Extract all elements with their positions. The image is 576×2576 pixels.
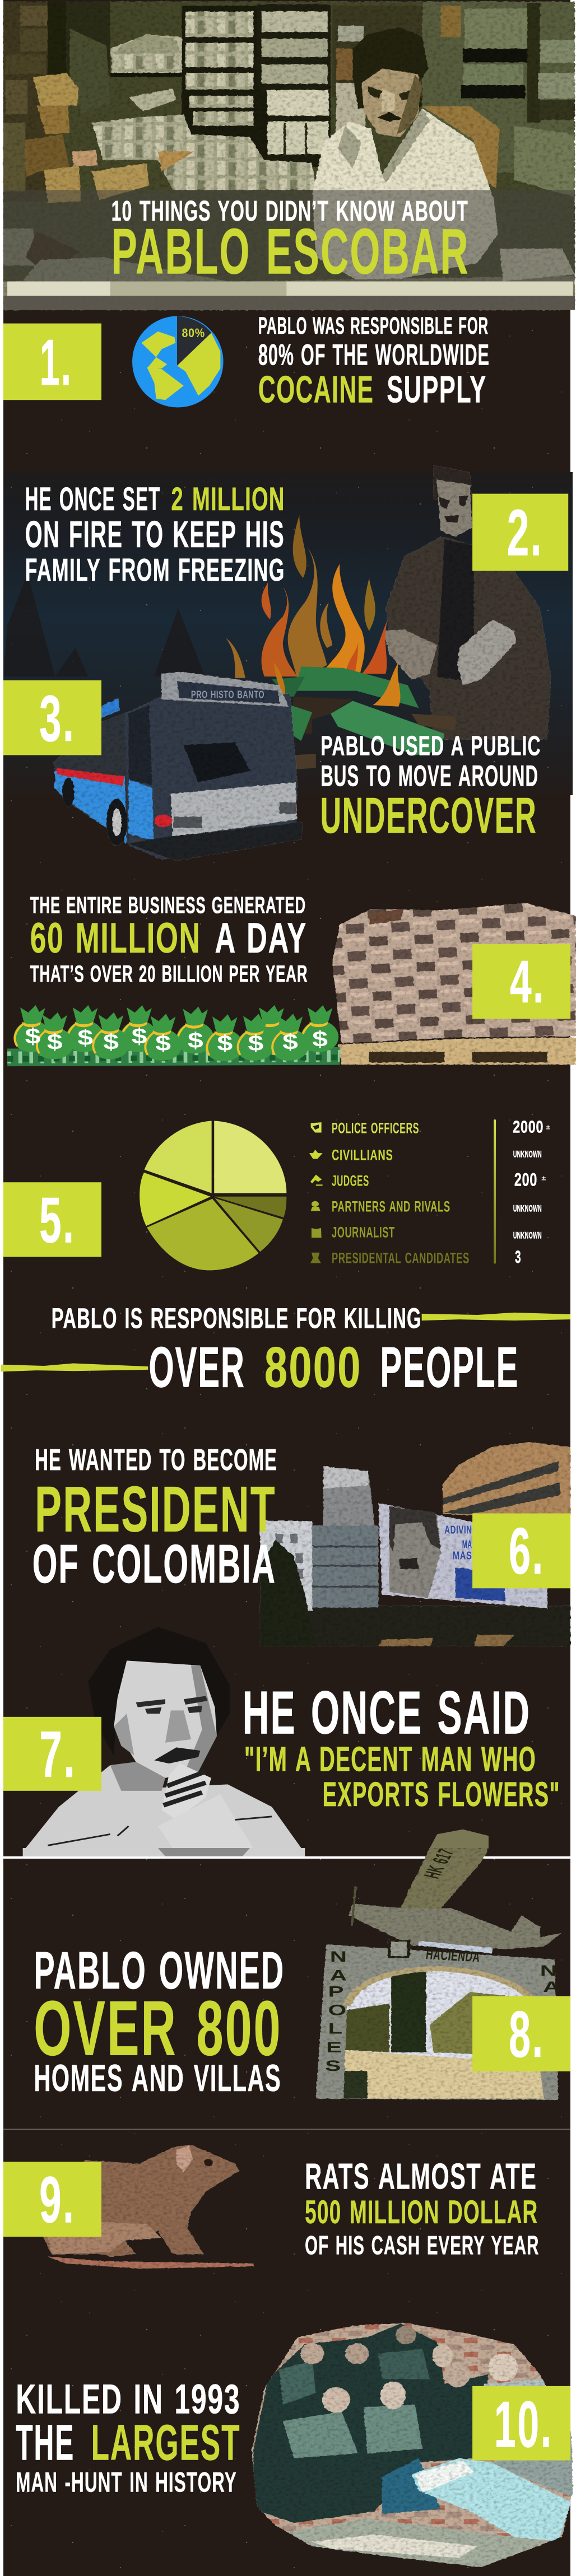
hacienda napoles gate and plane: A bbox=[543, 1979, 561, 1995]
scribble line left bbox=[1, 1363, 148, 1371]
white divider bbox=[3, 1856, 570, 1859]
over 8000 people bbox=[149, 1336, 519, 1399]
fact 2 text bbox=[25, 481, 285, 587]
icon: globe with 80 percent wedge bbox=[132, 316, 224, 408]
fact 6 text: HE WANTED TO BECOME bbox=[35, 1443, 277, 1477]
icon: gavel bbox=[310, 1174, 323, 1186]
icon: sombrero bbox=[309, 1150, 323, 1159]
fact 4 text: A DAY bbox=[215, 914, 307, 962]
facts 8 and 9 bbox=[3, 1847, 570, 2269]
fact 1 text bbox=[258, 313, 490, 410]
badge 8 bbox=[472, 1996, 570, 2071]
facts 9 text and 10: LARGEST bbox=[91, 2415, 240, 2471]
money bags: $ bbox=[155, 1032, 172, 1056]
fact 1 text: COCAINE bbox=[258, 368, 374, 410]
facts 2 and 3: fire and bus scene: ON FIRE TO KEEP HIS bbox=[25, 514, 285, 556]
fact 7 text bbox=[243, 1678, 560, 1813]
fact 10 text bbox=[16, 2376, 240, 2498]
hacienda napoles gate and plane: N bbox=[330, 1949, 347, 1965]
facts 9 text and 10: MAN -HUNT IN HISTORY bbox=[16, 2467, 237, 2498]
over 8000 people: OVER bbox=[149, 1336, 245, 1399]
facts 2 and 3: fire and bus scene bbox=[3, 465, 568, 861]
over 8000 people: 8000 bbox=[264, 1336, 362, 1399]
silhouettes of trees bbox=[4, 573, 204, 676]
legend: CIVILLIANS bbox=[332, 1147, 393, 1164]
legend values: 200 bbox=[514, 1169, 537, 1189]
badge 7 bbox=[3, 1717, 101, 1791]
header photo panel bbox=[3, 2, 575, 310]
pale strip below band bbox=[7, 282, 571, 296]
buildings and billboard: MA bbox=[462, 1538, 472, 1551]
hacienda napoles gate and plane: O bbox=[328, 2002, 347, 2018]
posterized office photo bbox=[3, 2, 575, 310]
fact 2 text: 2 MILLION bbox=[171, 481, 285, 517]
lower grey band bbox=[3, 296, 575, 310]
money bags: $ bbox=[25, 1024, 41, 1048]
night sky background bbox=[3, 472, 573, 795]
pie chart bbox=[140, 1121, 286, 1270]
legend values: ± bbox=[541, 1174, 546, 1182]
hacienda napoles gate and plane: S bbox=[325, 2057, 342, 2074]
icon: police bbox=[311, 1122, 322, 1132]
fact 6 text: PRESIDENT bbox=[35, 1473, 276, 1546]
hacienda napoles gate and plane: N bbox=[540, 1963, 558, 1979]
legend: JOURNALIST bbox=[332, 1224, 395, 1241]
badge 3: 3. bbox=[39, 682, 75, 755]
facts 2 and 3: fire and bus scene: FAMILY FROM FREEZING bbox=[25, 552, 285, 587]
money bags: $ bbox=[132, 1024, 148, 1048]
scribble line right bbox=[422, 1313, 570, 1320]
badge 4 bbox=[472, 944, 570, 1019]
fact 9 text bbox=[305, 2194, 539, 2260]
badge 3 bbox=[3, 680, 101, 755]
bus bbox=[53, 671, 303, 861]
translucent title band bbox=[3, 190, 575, 282]
vertical divider bbox=[494, 1119, 496, 1264]
fact 10 text: THE bbox=[16, 2415, 75, 2471]
icon: candidate bbox=[310, 1253, 321, 1263]
badge 6: 6. bbox=[509, 1515, 545, 1588]
hacienda napoles gate and plane: E bbox=[326, 2039, 343, 2056]
badge 1 bbox=[3, 324, 101, 400]
legend values: ± bbox=[546, 1123, 551, 1131]
facts 9 text and 10: KILLED IN 1993 bbox=[16, 2376, 240, 2422]
legend bbox=[309, 1120, 470, 1267]
hacienda napoles gate and plane: HK 617 bbox=[419, 1847, 458, 1880]
icon: person bbox=[311, 1201, 320, 1211]
legend values: 2000 bbox=[513, 1118, 544, 1136]
money bags: $ bbox=[77, 1026, 94, 1049]
portrait with microphone bbox=[26, 1627, 301, 1848]
fact 1: cocaine supply bbox=[3, 313, 490, 410]
money bags: $ bbox=[217, 1032, 234, 1056]
hacienda napoles gate and plane: A bbox=[330, 1967, 347, 1984]
money bags: $ bbox=[248, 1032, 264, 1056]
fact 3 text bbox=[320, 730, 541, 843]
fact 2 text: HE ONCE SET bbox=[25, 481, 160, 517]
facts 6 and 7 bbox=[1, 1336, 570, 1848]
buildings and billboard bbox=[260, 1442, 570, 1646]
money bags bbox=[7, 1005, 340, 1061]
hacienda napoles gate and plane: P bbox=[328, 1984, 345, 2000]
money bags: $ bbox=[103, 1030, 120, 1054]
fact 6 text: OF COLOMBIA bbox=[32, 1534, 276, 1594]
plane wing tip bbox=[430, 1830, 489, 1848]
rat bbox=[40, 2145, 253, 2269]
fact 8 text bbox=[34, 1940, 285, 2099]
badge 7: 7. bbox=[39, 1718, 76, 1791]
pallet of cash bricks bbox=[332, 903, 576, 1065]
legend: JUDGES bbox=[332, 1173, 369, 1189]
legend values: 3 bbox=[515, 1247, 521, 1267]
money bags: $ bbox=[282, 1030, 299, 1054]
money bags: $ bbox=[312, 1027, 329, 1051]
badge 2 bbox=[472, 494, 568, 571]
money bundles bbox=[272, 662, 456, 769]
facts 4 and 5: money and death toll bbox=[3, 893, 576, 1334]
badge 9 bbox=[3, 2162, 101, 2237]
badge 9: 9. bbox=[39, 2163, 75, 2237]
legend: POLICE OFFICERS bbox=[332, 1120, 419, 1137]
man burning money bbox=[384, 465, 551, 739]
flames bbox=[226, 515, 388, 679]
money bags: $ bbox=[47, 1030, 63, 1054]
legend values bbox=[513, 1118, 551, 1267]
fact 6 text bbox=[32, 1443, 277, 1594]
badge 5: 5. bbox=[39, 1184, 75, 1257]
buildings and billboard: MAS bbox=[453, 1549, 472, 1562]
icon: globe with 80 percent wedge: 80% bbox=[182, 326, 205, 340]
icon: book bbox=[312, 1228, 322, 1238]
hacienda napoles gate and plane: HACIENDA bbox=[425, 1947, 481, 1966]
thin divider bbox=[3, 2129, 570, 2130]
badge 5 bbox=[3, 1182, 101, 1257]
badge 1: 1. bbox=[40, 326, 72, 399]
hacienda napoles gate and plane: L bbox=[328, 2020, 343, 2037]
money bags: $ bbox=[188, 1029, 204, 1053]
buildings and billboard: ADIVIN bbox=[444, 1523, 472, 1536]
hacienda napoles gate and plane bbox=[316, 1847, 562, 2101]
portrait lower edge bbox=[23, 1848, 305, 1856]
facts 9 text and 10 bbox=[16, 2194, 576, 2569]
legend: PARTNERS AND RIVALS bbox=[332, 1198, 450, 1215]
fact 4 text bbox=[30, 893, 308, 987]
bus: PRO HISTO BANTO bbox=[191, 689, 264, 701]
fact 4 text: 60 MILLION bbox=[30, 914, 201, 962]
badge 6 bbox=[472, 1513, 570, 1588]
photo of soldiers bbox=[250, 2321, 576, 2569]
